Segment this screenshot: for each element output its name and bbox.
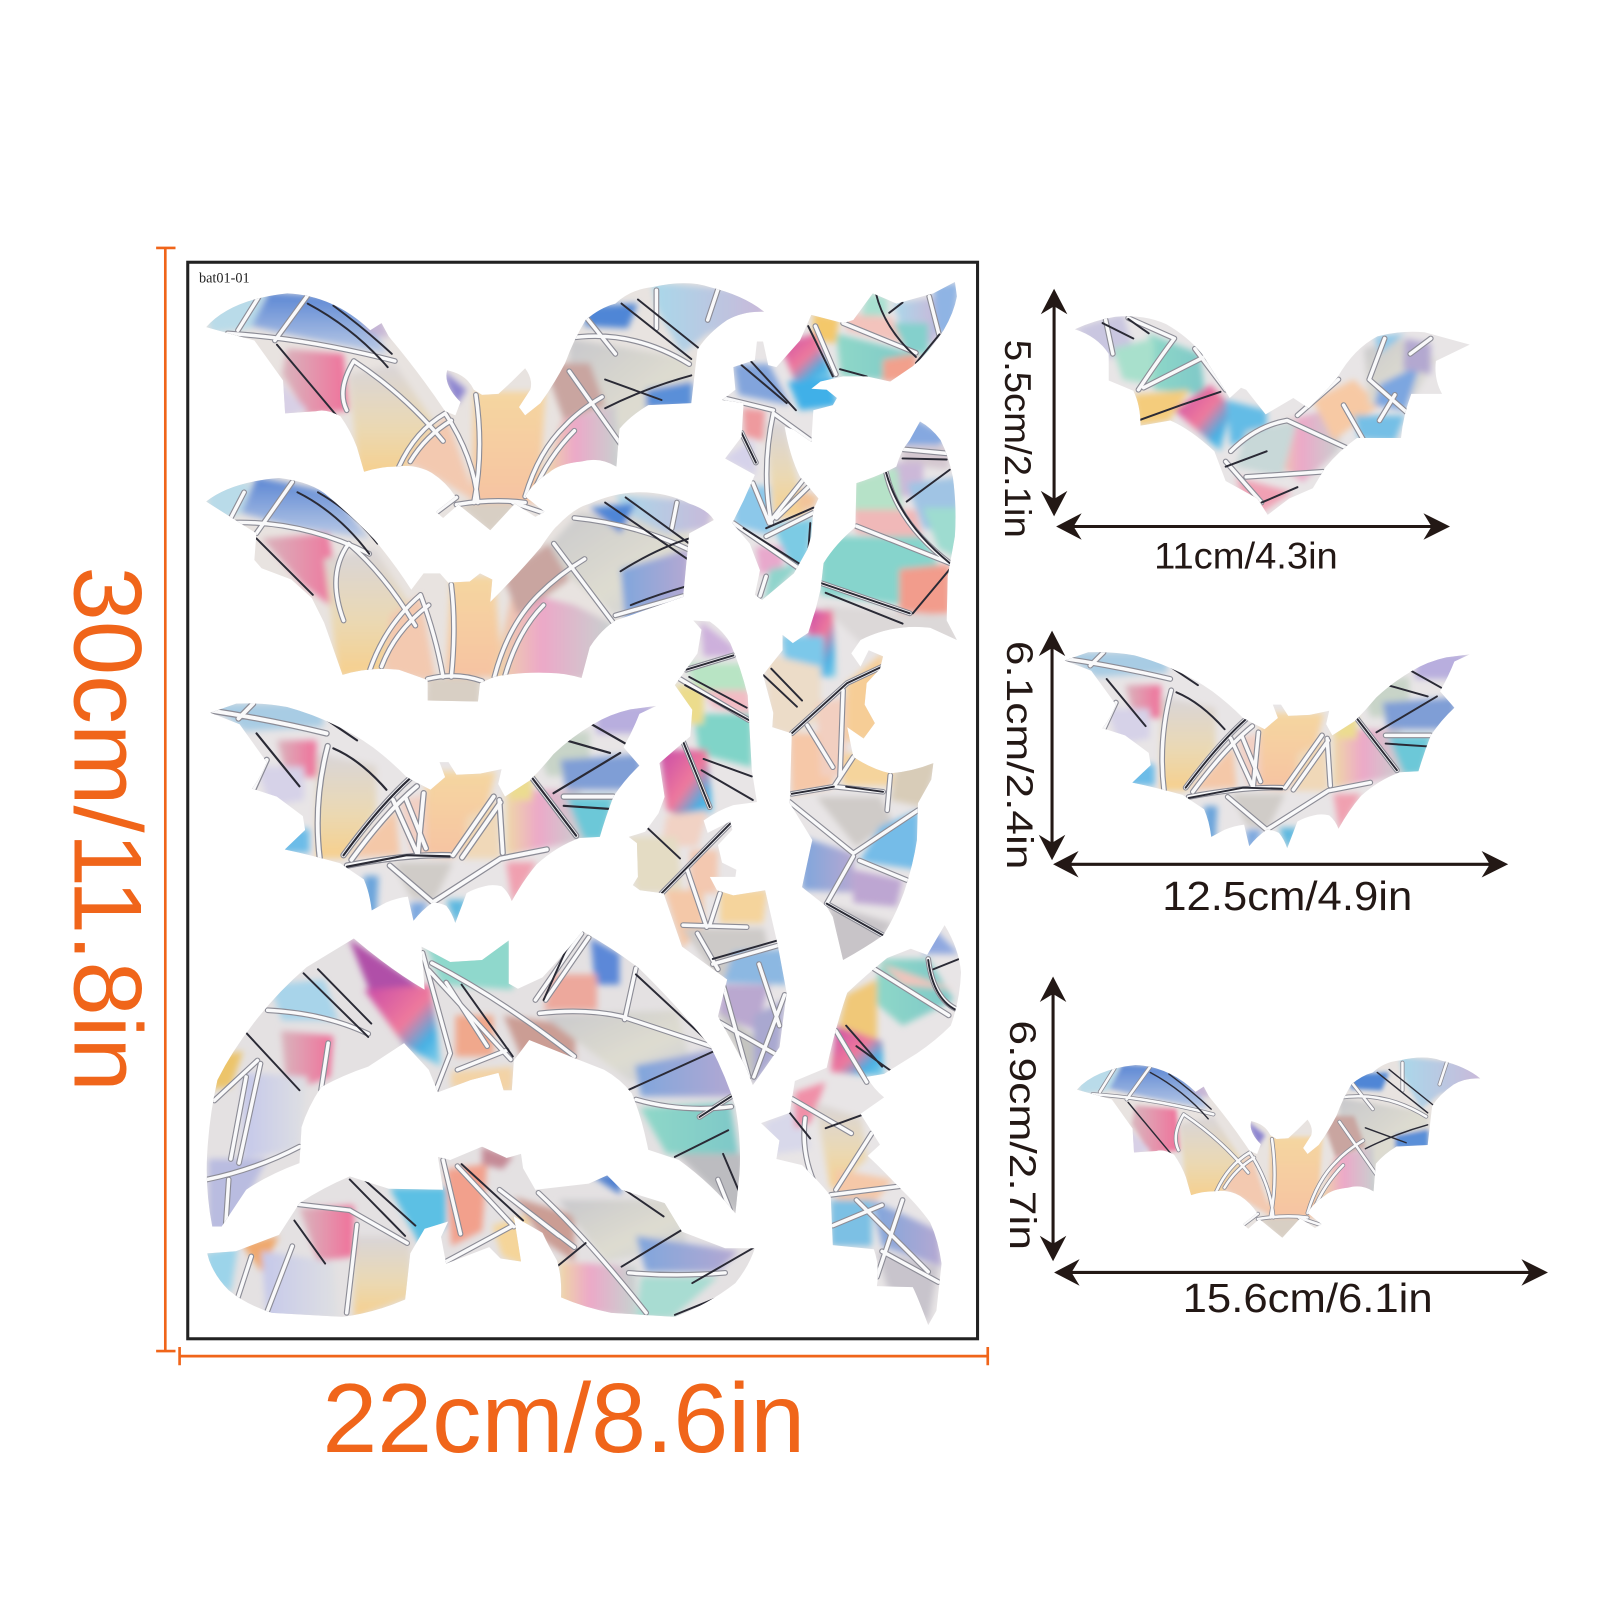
label: 12.5cm/4.9in: 12.5cm/4.9in <box>1162 873 1412 919</box>
label: 11cm/4.3in: 11cm/4.3in <box>1154 535 1338 576</box>
bat sticker: third left <box>201 697 664 926</box>
bat sticker: right tall bat <box>763 422 957 960</box>
label: 6.9cm/2.7in: 6.9cm/2.7in <box>1002 1020 1043 1250</box>
bat sticker: second left <box>200 472 723 708</box>
height label: 30cm/11.8in <box>53 566 162 1092</box>
arrows: 15.6cm bat width <box>1054 1259 1548 1286</box>
side bat 3: 15.6cm <box>1072 1053 1488 1240</box>
arrows: 11cm bat height <box>1041 289 1067 516</box>
sheet code label: bat01-01 <box>199 271 250 287</box>
side bat 1: 11cm <box>1072 310 1477 520</box>
width label: 22cm/8.6in <box>322 1363 805 1473</box>
all bat stickers <box>200 277 1488 1328</box>
label: 6.1cm/2.4in: 6.1cm/2.4in <box>999 641 1040 869</box>
bat sticker: top left <box>200 277 774 533</box>
orange height bracket <box>156 248 176 1351</box>
arrows: 12.5cm bat width <box>1053 851 1508 878</box>
bat sticker: upper right rotated <box>718 279 969 607</box>
label: 5.5cm/2.1in: 5.5cm/2.1in <box>997 340 1038 538</box>
label: 15.6cm/6.1in: 15.6cm/6.1in <box>1183 1275 1433 1321</box>
arrows: 15.6cm bat height <box>1040 977 1066 1261</box>
bat sticker: large arched bat <box>200 928 749 1236</box>
side bat 2: 12.5cm <box>1056 646 1477 851</box>
bat sticker: centre vertical bat <box>624 615 793 1092</box>
arrows: 11cm bat width <box>1056 513 1450 540</box>
orange width bracket <box>180 1347 988 1365</box>
sheet frame <box>188 262 978 1339</box>
bat sticker: bottom wide bat <box>205 1147 764 1326</box>
arrows: 12.5cm bat height <box>1039 631 1065 860</box>
bat sticker: bottom right rotated <box>757 923 967 1328</box>
